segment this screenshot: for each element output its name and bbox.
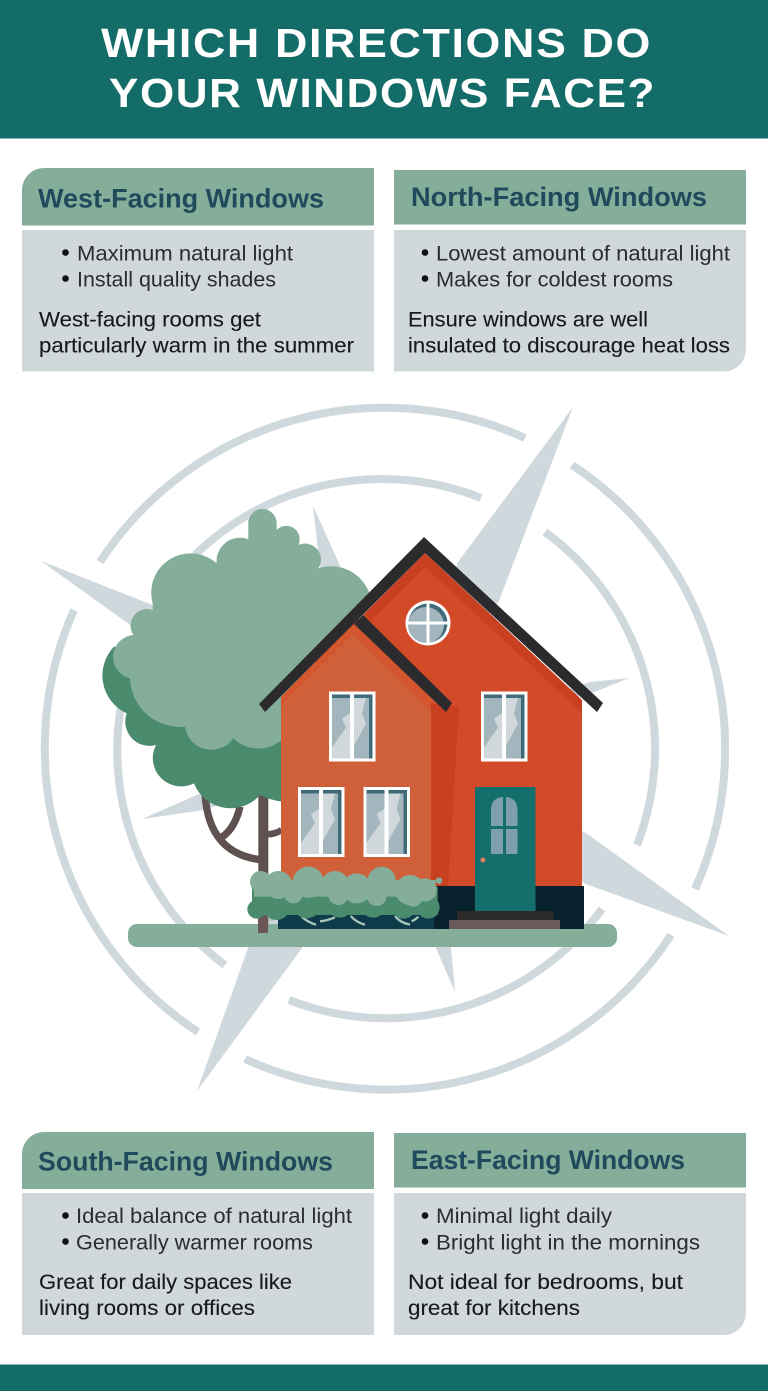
hedge light layer <box>250 867 442 907</box>
ground strip <box>128 924 617 947</box>
panel: south-facing windows <box>22 1132 374 1335</box>
note: north-facing: Ensure windows are well <box>408 308 648 332</box>
window: upper left <box>329 692 376 762</box>
bullet list: south-facing <box>62 1205 352 1254</box>
panel: north-facing windows <box>394 170 746 372</box>
window: lower left <box>298 787 344 857</box>
note: north-facing: insulated to discourage heat loss <box>408 334 730 358</box>
dark foliage <box>102 647 282 808</box>
bullet list: north-facing: Lowest amount of natural light <box>436 242 730 266</box>
bullet list: north-facing: Makes for coldest rooms <box>436 268 673 292</box>
hedge dark layer <box>247 887 440 920</box>
note: south-facing: Great for daily spaces like <box>39 1271 292 1294</box>
bullet list: south-facing: Generally warmer rooms <box>76 1232 313 1254</box>
heading: west-facing: West-Facing Windows <box>38 184 324 214</box>
heading: north-facing: North-Facing Windows <box>411 182 707 212</box>
round attic window <box>406 600 450 646</box>
bullet list: north-facing <box>422 242 730 292</box>
heading: south-facing: South-Facing Windows <box>38 1146 333 1176</box>
bullet list: east-facing <box>422 1205 700 1254</box>
note: east-facing: great for kitchens <box>408 1297 580 1320</box>
light foliage <box>113 509 370 750</box>
note: west-facing: West-facing rooms get <box>39 308 261 332</box>
bullet list: east-facing: Minimal light daily <box>436 1205 613 1228</box>
window: lower middle <box>364 787 410 857</box>
tree trunk and branches <box>205 793 282 933</box>
bullet list: west-facing: Maximum natural light <box>77 242 293 266</box>
note: north-facing <box>408 308 730 358</box>
title banner <box>0 0 768 138</box>
bullet list: west-facing <box>62 242 293 292</box>
compass star points <box>41 407 729 1091</box>
title line 1: WHICH DIRECTIONS DO <box>101 20 652 66</box>
bullet list: south-facing: Ideal balance of natural light <box>76 1205 352 1228</box>
title line 2: YOUR WINDOWS FACE? <box>109 70 656 116</box>
bullet list: east-facing: Bright light in the mornings <box>436 1232 700 1254</box>
note: east-facing: Not ideal for bedrooms, but <box>408 1271 683 1294</box>
note: south-facing <box>39 1271 292 1320</box>
heading: east-facing: East-Facing Windows <box>411 1145 685 1175</box>
roof: front gable <box>354 615 452 712</box>
left wall <box>281 618 440 915</box>
wall shadow column <box>431 703 459 886</box>
tree trunk base <box>258 905 268 933</box>
bullet list: west-facing: Install quality shades <box>77 268 276 292</box>
hedge leaves <box>268 916 418 925</box>
compass rings <box>45 408 725 1090</box>
note: west-facing: particularly warm in the summer <box>39 334 354 358</box>
illustration: house <box>259 537 603 929</box>
foundation <box>278 886 584 929</box>
right wall <box>363 553 582 886</box>
hedge <box>247 867 442 925</box>
front door <box>475 787 536 911</box>
panel: east-facing windows <box>394 1133 746 1335</box>
illustration: tree <box>102 509 370 933</box>
roof: main gable <box>259 537 603 712</box>
panel: west-facing windows <box>22 168 374 372</box>
footer band <box>0 1364 768 1391</box>
door steps <box>449 911 560 929</box>
note: west-facing <box>39 308 354 358</box>
window: upper right <box>481 692 528 762</box>
note: east-facing <box>408 1271 683 1320</box>
compass rose background <box>41 407 729 1091</box>
note: south-facing: living rooms or offices <box>39 1297 255 1320</box>
